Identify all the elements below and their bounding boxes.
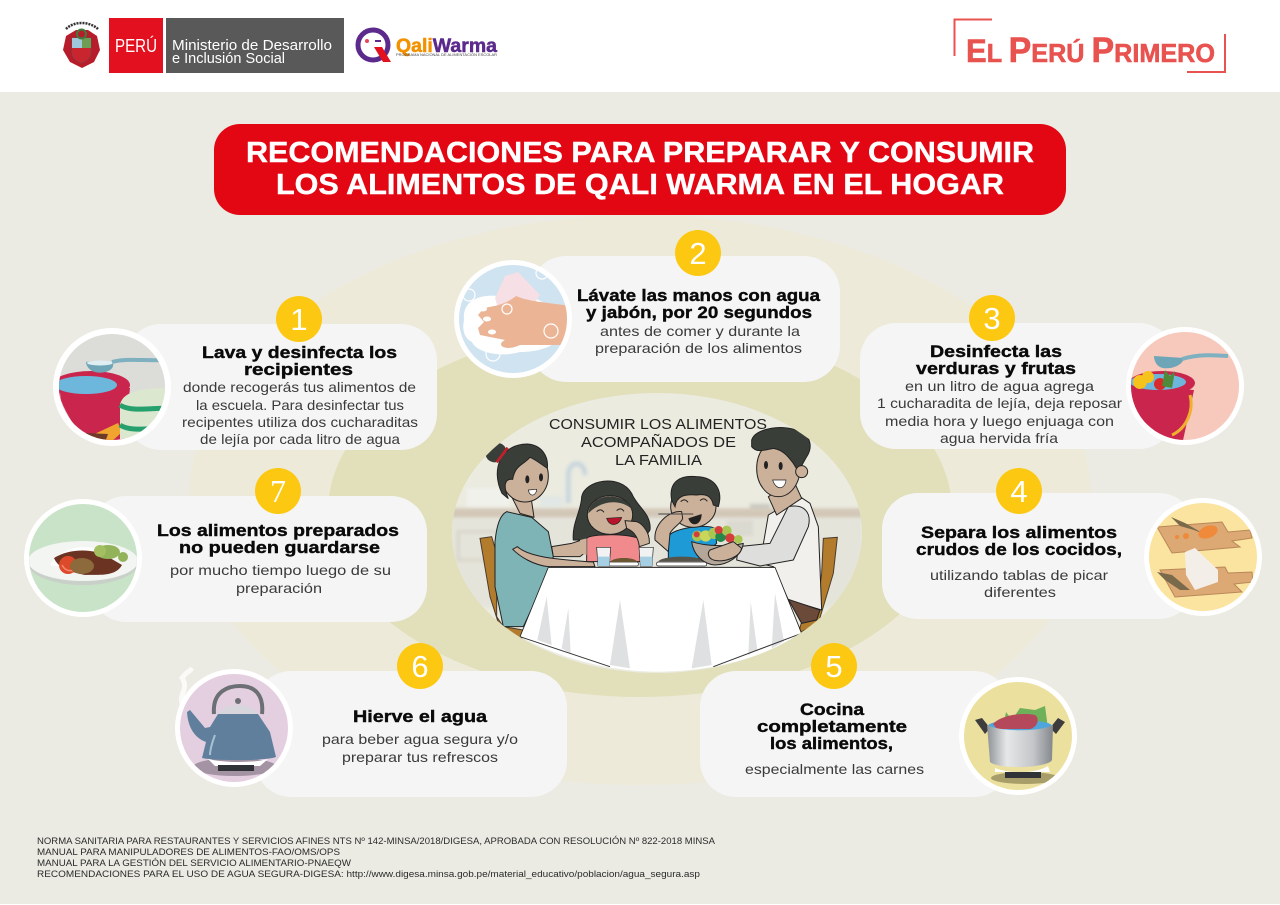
panel: step 5	[700, 643, 1080, 797]
footer references: MANUAL PARA LA GESTIÓN DEL SERVICIO ALIMENTARIO-PNAEQW	[37, 858, 352, 869]
text: step 6	[322, 707, 518, 765]
mother	[482, 439, 595, 627]
text: step 4	[916, 523, 1122, 600]
text: step 5	[745, 700, 924, 777]
text: step 7	[157, 521, 399, 596]
text: step 2: y jabón, por 20 segundos	[586, 303, 812, 322]
badge: number 2	[675, 230, 721, 276]
boy	[655, 476, 720, 560]
icon: washing hands	[454, 260, 575, 380]
text: step 4: diferentes	[984, 585, 1056, 600]
footer references	[37, 836, 716, 880]
text: step 1: recipentes utiliza dos cucharaditas	[182, 415, 418, 430]
plates and glasses	[597, 547, 707, 566]
badge: number 6	[397, 643, 443, 689]
icon: coat of arms	[63, 23, 100, 68]
logo: ministry grey box: e Inclusión Social	[172, 50, 285, 67]
text: step 1: Lava y desinfecta los	[202, 343, 397, 362]
logo: ministry grey box	[166, 18, 344, 73]
text: step 1: la escuela. Para desinfectar tus	[196, 398, 404, 413]
logo: Qali Warma	[358, 30, 497, 62]
text: step 4: crudos de los cocidos,	[916, 540, 1122, 559]
text: step 3: 1 cucharadita de lejía, deja reposar	[877, 396, 1123, 411]
logo: El Perú Primero	[954, 20, 1225, 72]
girl	[573, 481, 650, 562]
badge: number 7: 7	[270, 473, 286, 509]
text: step 1: donde recogerás tus alimentos de	[183, 380, 416, 395]
central caption	[549, 416, 767, 469]
left chair	[480, 537, 523, 638]
logo: Perú red box	[109, 18, 163, 73]
icon: kettle on burner	[175, 668, 295, 787]
text: step 3: agua hervida fría	[940, 431, 1058, 446]
central illustration: family at table	[450, 393, 863, 673]
logo: Perú red box: PERÚ	[115, 35, 157, 56]
footer references: NORMA SANITARIA PARA RESTAURANTES Y SERVICIOS AFINES NTS Nº 142-MINSA/2018/DIGESA, APROBADA CON RESOLUCIÓN Nº 822-2018 MINSA	[37, 836, 716, 847]
panel: step 4	[882, 468, 1265, 619]
tablecloth	[520, 567, 802, 672]
text: step 1	[182, 343, 418, 447]
text: step 7: preparación	[236, 581, 322, 596]
text: step 5: completamente	[757, 717, 907, 736]
text: step 3: en un litro de agua agrega	[905, 379, 1095, 394]
text: step 1: de lejía por cada litro de agua	[200, 432, 400, 447]
outer background ellipse	[189, 215, 1091, 785]
text: step 6: Hierve el agua	[353, 707, 488, 726]
text: step 3: verduras y frutas	[916, 359, 1076, 378]
logo: Qali Warma: PROGRAMA NACIONAL DE ALIMENTACIÓN ESCOLAR	[396, 52, 497, 57]
text: step 3	[877, 342, 1123, 446]
footer references: RECOMENDACIONES PARA EL USO DE AGUA SEGURA-DIGESA: http://www.digesa.minsa.gob.pe/material_educativo/poblacion/agua_segura.asp	[37, 869, 700, 880]
badge: number 5: 5	[825, 649, 843, 684]
text: step 7: Los alimentos preparados	[157, 521, 399, 540]
badge: number 1: 1	[290, 302, 308, 337]
blurred kitchen background	[453, 460, 861, 564]
badge: number 4: 4	[1010, 474, 1028, 509]
header logos: government	[63, 18, 344, 73]
text: step 7: por mucho tiempo luego de su	[170, 563, 391, 578]
panel: step 3	[860, 295, 1245, 449]
text: step 5: los alimentos,	[770, 734, 893, 753]
text: step 3: Desinfecta las	[930, 342, 1062, 361]
text: step 4: Separa los alimentos	[921, 523, 1117, 542]
logo: ministry grey box: Ministerio de Desarrollo	[172, 37, 332, 54]
central caption: ACOMPAÑADOS DE	[581, 434, 736, 451]
text: step 2	[577, 286, 821, 356]
badge: number 3	[969, 295, 1015, 341]
badge: number 2: 2	[689, 236, 707, 271]
title banner: LOS ALIMENTOS DE QALI WARMA EN EL HOGAR	[276, 169, 1004, 201]
panel: step 6	[175, 643, 567, 797]
text: step 2: Lávate las manos con agua	[577, 286, 821, 305]
icon: pot on burner	[959, 677, 1080, 795]
text: step 6: para beber agua segura y/o	[322, 732, 518, 747]
badge: number 1	[276, 296, 322, 342]
text: step 6: preparar tus refrescos	[342, 750, 498, 765]
panel: step 1	[50, 296, 437, 450]
badge: number 3: 3	[983, 301, 1001, 336]
logo: Qali Warma: QaliWarma	[396, 36, 497, 57]
text: step 4: utilizando tablas de picar	[930, 568, 1109, 583]
icon: bucket with fruits	[1125, 327, 1245, 445]
logo: El Perú Primero: EL PERÚ PRIMERO	[966, 31, 1215, 70]
badge: number 5	[811, 643, 857, 689]
central caption: LA FAMILIA	[615, 452, 702, 469]
icon: bucket and containers	[50, 328, 175, 446]
text: step 3: media hora y luego enjuaga con	[885, 414, 1114, 429]
panel: step 2	[454, 230, 840, 382]
icon: plate of food	[24, 499, 145, 617]
text: step 7: no pueden guardarse	[179, 538, 380, 557]
father	[737, 428, 822, 623]
central caption: CONSUMIR LOS ALIMENTOS	[549, 416, 767, 433]
badge: number 6: 6	[411, 649, 429, 684]
salad bowl	[692, 526, 743, 565]
footer references: MANUAL PARA MANIPULADORES DE ALIMENTOS-FAO/OMS/OPS	[37, 847, 340, 858]
title banner	[214, 124, 1066, 215]
inner background ellipse	[328, 325, 952, 697]
text: step 5: Cocina	[800, 700, 865, 719]
text: step 2: preparación de los alimentos	[595, 341, 802, 356]
icon: cutting boards	[1144, 498, 1265, 616]
right chair	[798, 537, 837, 633]
text: step 1: recipientes	[244, 360, 353, 379]
panel: step 7	[24, 468, 427, 622]
badge: number 4	[996, 468, 1042, 514]
badge: number 7	[255, 468, 301, 514]
text: step 5: especialmente las carnes	[745, 762, 924, 777]
text: step 2: antes de comer y durante la	[600, 324, 801, 339]
title banner: RECOMENDACIONES PARA PREPARAR Y CONSUMIR	[246, 137, 1034, 169]
